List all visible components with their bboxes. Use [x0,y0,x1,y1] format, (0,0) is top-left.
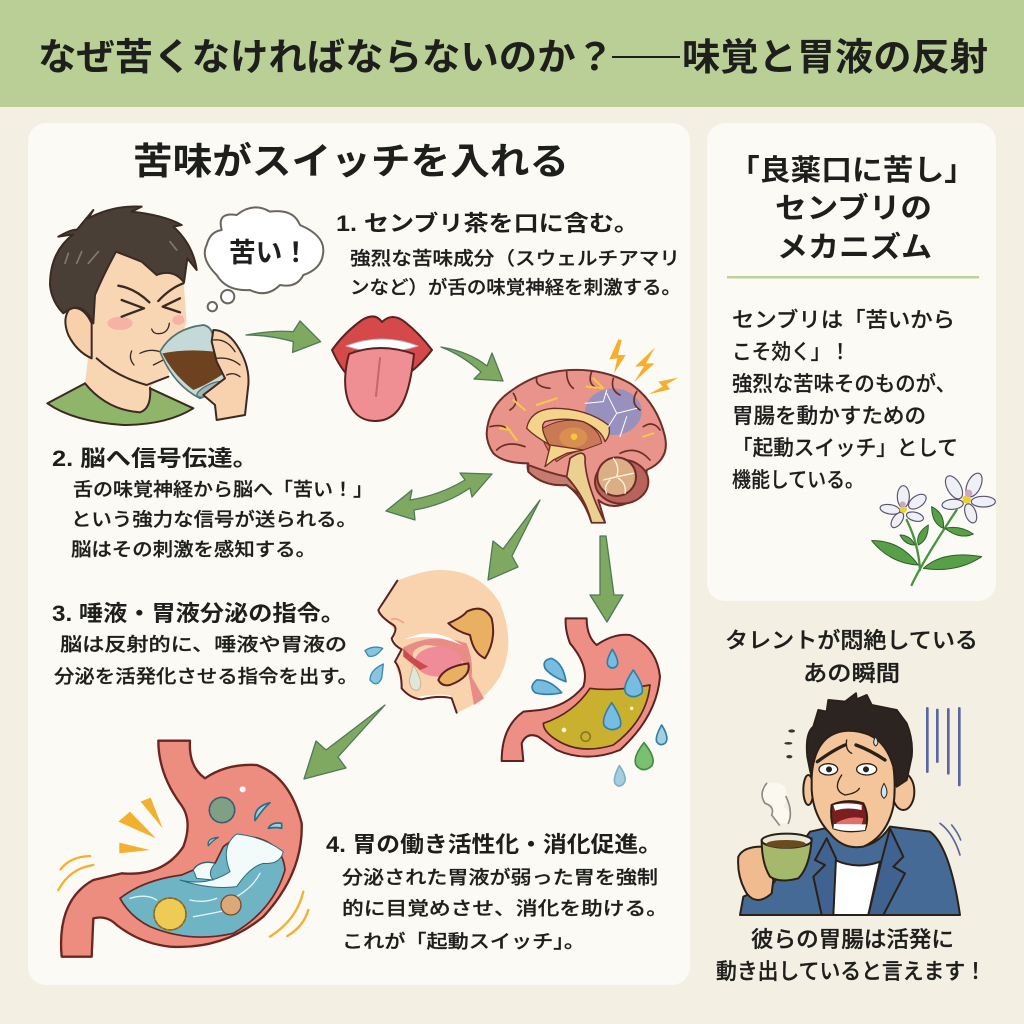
step 2 text: 脳はその刺激を感知する。 [71,536,316,562]
arrow: brain and step 2 [386,473,492,520]
icon: stomach with gastric juice [502,618,667,786]
body text [732,304,958,494]
speech bubble: bitter: 苦い！ [229,231,309,270]
step 4 text: これが「起動スイッチ」。 [342,928,585,954]
step 2 text: 2. 脳へ信号伝達。 [52,446,258,471]
body text: こそ効く」！ [732,336,850,366]
text: stomach starts moving: 動き出していると言えます！ [716,954,986,986]
arrow: saliva to stomach [304,705,385,779]
title banner: 味覚と胃液の反射 [682,26,988,81]
panel heading: メカニズム [777,224,932,266]
icon: talent drinking tea [738,693,961,915]
icon: senburi flower [872,471,995,585]
icon: man drinking tea [47,206,249,425]
step 1 text: 1. センブリ茶を口に含む。 [336,211,639,236]
text: stomach starts moving [716,922,986,986]
step 4 text [326,832,668,954]
step 3 text: 分泌を活発化させる指令を出す。 [54,663,358,689]
panel heading: 「良薬口に苦し」 [729,147,975,189]
step 1 text: 強烈な苦味成分（スウェルチアマリ [350,245,680,271]
step 2 text: という強力な信号が送られる。 [71,506,357,532]
text: talent agonizing: タレントが悶絶している [725,623,978,655]
title banner [0,0,1024,107]
step 2 text [52,446,373,562]
step 1 text: ンなど）が舌の味覚神経を刺激する。 [350,274,681,300]
step 2 text: 舌の味覚神経から脳へ「苦い！」 [73,476,373,502]
text: talent agonizing: あの瞬間 [803,656,900,688]
arrow: mouth to brain [441,347,503,381]
icon: brain [487,339,678,523]
step 4 text: 的に目覚めさせ、消化を助ける。 [342,895,668,921]
icon: mouth and tongue [332,316,432,421]
body text: 機能している。 [732,464,864,494]
step 4 text: 4. 胃の働き活性化・消化促進。 [326,832,662,857]
speech bubble: bitter [205,207,323,311]
step 1 text [336,211,681,300]
arrow: man to mouth [246,321,321,352]
step 3 text [52,601,358,689]
arrow: brain to saliva [488,500,540,580]
text: stomach starts moving: 彼らの胃腸は活発に [751,922,954,954]
panel heading: センブリの [775,185,932,227]
panel heading [729,147,975,266]
text: talent agonizing [725,623,978,688]
step 3 text: 脳は反射的に、唾液や胃液の [60,631,347,657]
panel: senburi mechanism [707,123,996,601]
panel: bitter switch [28,123,690,985]
body text: 強烈な苦味そのものが、 [732,368,956,398]
panel heading: 苦味がスイッチを入れる [133,131,569,185]
title banner: なぜ苦くなければならないのか？ [38,26,614,81]
body text: 「起動スイッチ」として [732,432,958,462]
icon: salivary glands [365,570,508,713]
step 4 text: 分泌された胃液が弱った胃を強制 [342,864,658,890]
arrow: brain to stomach [590,536,623,622]
step 3 text: 3. 唾液・胃液分泌の指令。 [52,601,345,626]
icon: active stomach [58,741,308,957]
body text: 胃腸を動かすための [732,400,926,430]
body text: センブリは「苦いから [732,304,955,334]
